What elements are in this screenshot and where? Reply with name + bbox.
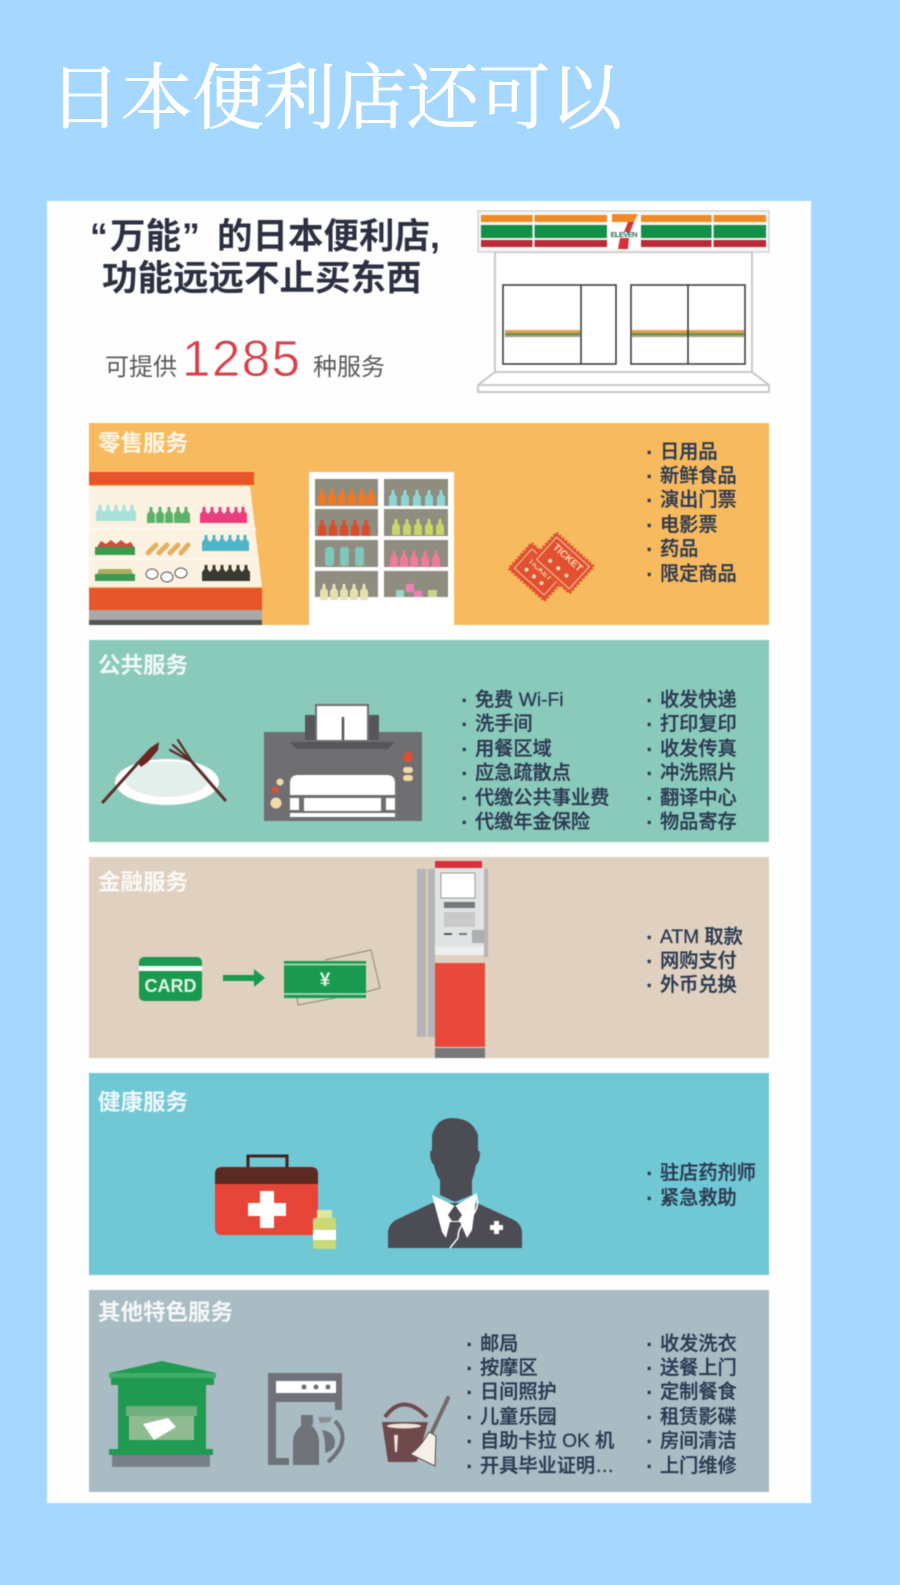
list: health services: · xyxy=(646,1163,652,1184)
icon: post box xyxy=(109,1361,216,1467)
list: public services right column: · xyxy=(646,739,652,760)
list: public services left column: 免费 Wi-Fi xyxy=(475,689,563,711)
icon: pharmacist silhouette xyxy=(388,1118,522,1248)
list: retail items: 演出门票 xyxy=(660,489,737,511)
heading: retail: 零售服务 xyxy=(98,431,188,456)
list: public services left column: 代缴年金保险 xyxy=(475,811,590,833)
headline: “ xyxy=(90,216,108,256)
icon: refrigerated shelf xyxy=(89,472,262,625)
list: public services right column: · xyxy=(646,690,652,711)
title: 日本便利店还可以 xyxy=(49,59,625,139)
list: other services left column: 儿童乐园 xyxy=(480,1406,557,1428)
list: other services left column: 日间照护 xyxy=(480,1381,557,1403)
icon: cash: ¥ xyxy=(320,970,331,991)
list: retail items: 新鲜食品 xyxy=(660,465,737,487)
list: public services right column: 收发快递 xyxy=(660,689,737,711)
list: retail items: · xyxy=(646,564,652,585)
icon: ATM xyxy=(417,861,488,1058)
list: public services left column: · xyxy=(461,812,467,833)
list: financial services: · xyxy=(646,927,652,948)
list: other services left column: 自助卡拉 OK 机 xyxy=(480,1430,614,1452)
list: public services right column: 冲洗照片 xyxy=(660,762,737,784)
arrow xyxy=(223,969,265,987)
list: public services right column xyxy=(646,689,737,833)
headline: 万能 xyxy=(110,216,181,256)
panel: public services xyxy=(89,640,769,842)
list: retail items: 限定商品 xyxy=(660,563,737,585)
list: public services right column: · xyxy=(646,812,652,833)
list: other services right column: · xyxy=(646,1358,652,1379)
list: public services left column xyxy=(461,689,609,833)
list: public services right column: · xyxy=(646,714,652,735)
icon: bank card xyxy=(139,957,202,1001)
list: other services right column: 送餐上门 xyxy=(660,1357,737,1379)
icon: store shelving xyxy=(309,472,454,625)
icon: bank card: CARD xyxy=(144,976,196,996)
icon: cash xyxy=(284,950,380,1005)
list: other services right column: · xyxy=(646,1334,652,1355)
list: health services: 驻店药剂师 xyxy=(660,1162,756,1184)
list: financial services xyxy=(646,926,743,996)
list: public services left column: · xyxy=(461,788,467,809)
icon: tickets: TICKET xyxy=(527,556,554,582)
list: public services left column: · xyxy=(461,763,467,784)
list: retail items: · xyxy=(646,515,652,536)
panel: other services xyxy=(89,1290,769,1492)
list: retail items: 日用品 xyxy=(660,442,718,463)
icon: tickets xyxy=(509,533,594,601)
list: public services right column: 收发传真 xyxy=(660,738,737,760)
list: public services left column: · xyxy=(461,714,467,735)
list: health services xyxy=(646,1162,756,1209)
list: other services right column: 房间清洁 xyxy=(660,1430,737,1452)
icon: tickets: TICKET xyxy=(550,542,584,574)
list: health services: 紧急救助 xyxy=(660,1187,737,1209)
list: other services left column xyxy=(466,1333,614,1477)
list: financial services: · xyxy=(646,975,652,996)
list: public services right column: · xyxy=(646,763,652,784)
list: retail items: 电影票 xyxy=(660,514,718,536)
list: public services right column: 打印复印 xyxy=(660,713,737,735)
list: other services left column: 按摩区 xyxy=(480,1357,538,1379)
list: other services right column xyxy=(646,1333,737,1477)
list: public services left column: · xyxy=(461,690,467,711)
icon: washing machine and detergent xyxy=(268,1373,343,1465)
stat: 1285 services: 1285 xyxy=(182,330,300,387)
list: public services left column: 代缴公共事业费 xyxy=(475,787,609,809)
icon: 7-Eleven store xyxy=(478,211,769,392)
list: financial services: · xyxy=(646,951,652,972)
list: other services right column: · xyxy=(646,1431,652,1452)
list: public services left column: · xyxy=(461,739,467,760)
panel: retail services xyxy=(89,423,769,625)
panel: health services xyxy=(89,1073,769,1275)
list: retail items xyxy=(646,442,737,585)
list: other services left column: · xyxy=(466,1334,472,1355)
list: other services right column: · xyxy=(646,1407,652,1428)
icon: printer xyxy=(264,705,422,821)
headline: 的日本便利店, xyxy=(217,216,440,256)
list: other services left column: · xyxy=(466,1358,472,1379)
list: retail items: · xyxy=(646,466,652,487)
list: public services right column: 翻译中心 xyxy=(660,787,737,809)
headline: ” xyxy=(182,216,200,256)
headline xyxy=(90,216,440,298)
list: financial services: 外币兑换 xyxy=(660,974,737,996)
list: public services right column: · xyxy=(646,788,652,809)
list: public services left column: 用餐区域 xyxy=(475,738,552,760)
list: other services right column: 收发洗衣 xyxy=(660,1333,737,1355)
list: public services left column: 应急疏散点 xyxy=(475,762,571,784)
list: retail items: · xyxy=(646,490,652,511)
stat: 1285 services: 种服务 xyxy=(313,354,385,381)
list: other services left column: · xyxy=(466,1407,472,1428)
list: public services right column: 物品寄存 xyxy=(660,811,737,833)
white infographic card xyxy=(47,201,811,1503)
headline: 功能远远不止买东西 xyxy=(102,258,422,298)
list: other services right column: · xyxy=(646,1456,652,1477)
list: retail items: · xyxy=(646,442,652,463)
stat: 1285 services: 可提供 xyxy=(105,354,177,381)
list: other services right column: 上门维修 xyxy=(660,1455,737,1477)
list: other services left column: · xyxy=(466,1456,472,1477)
list: retail items: · xyxy=(646,539,652,560)
list: public services left column: 洗手间 xyxy=(475,713,533,735)
list: other services left column: · xyxy=(466,1431,472,1452)
heading: finance: 金融服务 xyxy=(98,869,188,895)
list: other services left column: 开具毕业证明… xyxy=(480,1455,614,1477)
panel: financial services xyxy=(89,857,769,1058)
list: financial services: 网购支付 xyxy=(660,950,737,972)
list: other services left column: · xyxy=(466,1382,472,1403)
list: financial services: ATM 取款 xyxy=(660,926,743,948)
list: other services left column: 邮局 xyxy=(480,1333,518,1355)
icon: plate and cutlery xyxy=(103,740,225,805)
icon: first aid kit xyxy=(215,1156,336,1249)
list: other services right column: · xyxy=(646,1382,652,1403)
list: other services right column: 定制餐食 xyxy=(660,1381,737,1403)
stat: 1285 services xyxy=(105,330,385,387)
list: other services right column: 租赁影碟 xyxy=(660,1406,737,1428)
list: health services: · xyxy=(646,1188,652,1209)
heading: public: 公共服务 xyxy=(98,653,188,678)
icon: 7-Eleven store: ELEVEN xyxy=(610,230,638,239)
icon: bucket and broom xyxy=(382,1398,448,1466)
heading: other: 其他特色服务 xyxy=(98,1300,233,1325)
heading: health: 健康服务 xyxy=(98,1089,188,1115)
list: retail items: 药品 xyxy=(660,538,698,560)
